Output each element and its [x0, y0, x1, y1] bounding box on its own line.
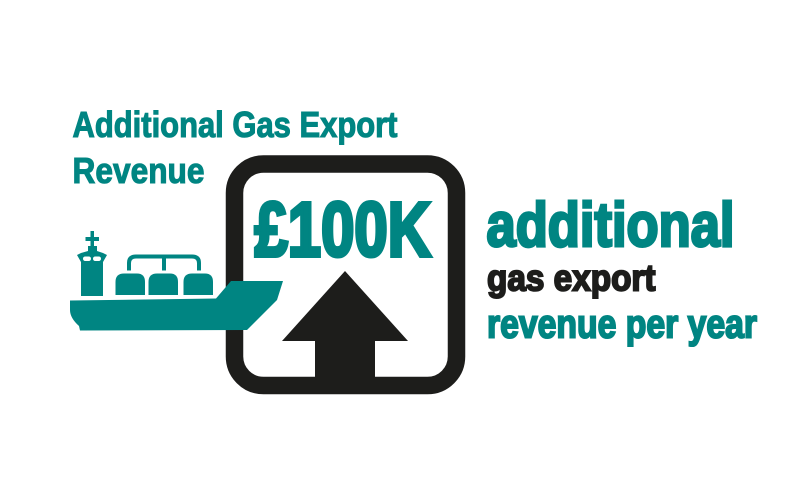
gas export: gas export [487, 258, 656, 298]
icon: up arrow [282, 271, 408, 380]
title [72, 104, 398, 191]
title: Revenue [72, 150, 204, 191]
bridge windows [83, 256, 91, 261]
gas pipes [129, 256, 199, 270]
additional: additional [486, 191, 734, 260]
revenue per year: revenue per year [487, 302, 757, 346]
ship hull [70, 281, 283, 330]
description text [486, 191, 757, 346]
amount: £100K: £100K [254, 187, 431, 273]
rounded square frame [234, 164, 456, 386]
icon: gas tanker ship [70, 231, 283, 330]
ship bridge tower [77, 231, 107, 296]
gas tanks [116, 274, 145, 295]
title: Additional Gas Export [72, 104, 398, 145]
